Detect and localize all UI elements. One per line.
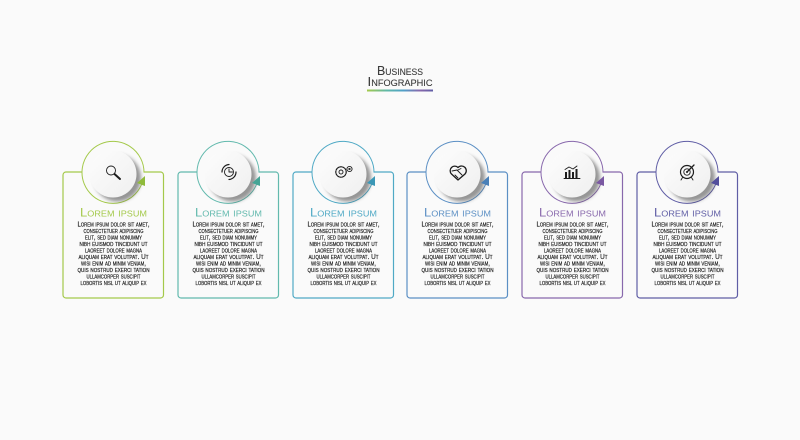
panel heading: Lorem ipsum [424, 208, 491, 220]
panel text: elit, sed diam nonummy [659, 234, 717, 242]
panel text: aliquam erat volutpat. Ut [194, 254, 264, 261]
panel heading: Lorem ipsum [80, 208, 147, 220]
icon: clock cycle [222, 164, 236, 180]
panel text: wisi enim ad minim veniam, [196, 260, 261, 268]
panel text: consectetuer adipiscing [198, 228, 259, 235]
panel text: Lorem ipsum dolor sit amet, [422, 222, 494, 228]
title: Infographic [368, 74, 433, 89]
panel text: lobortis nisl ut aliquip ex [196, 280, 262, 287]
panel text: laoreet dolore magna [544, 248, 602, 254]
panel text: quis nostrud exerci tation [308, 267, 380, 274]
panel heading: Lorem ipsum [310, 208, 377, 220]
panel heading: Lorem ipsum [539, 208, 606, 220]
panel text: elit, sed diam nonummy [85, 234, 143, 242]
panel text: quis nostrud exerci tation [422, 267, 494, 274]
panel text: quis nostrud exerci tation [536, 267, 609, 274]
panel text: lobortis nisl ut aliquip ex [424, 280, 491, 287]
panel text: nibh euismod tincidunt ut [654, 241, 722, 248]
icon: target with dart [680, 165, 694, 180]
title [367, 63, 433, 92]
panel text: nibh euismod tincidunt ut [310, 241, 378, 248]
panel text: consectetuer adipiscing [84, 228, 144, 235]
panel: step 4 blue [407, 141, 508, 298]
panel text: quis nostrud exerci tation [192, 267, 265, 274]
panel text: wisi enim ad minim veniam, [425, 260, 490, 268]
panel text: laoreet dolore magna [659, 248, 717, 254]
icon: magnifier [106, 166, 120, 179]
panel text: consectetuer adipiscing [542, 228, 603, 235]
panel text [536, 222, 609, 287]
icon: bar chart [564, 166, 580, 178]
panel text: quis nostrud exerci tation [652, 267, 724, 274]
panel text: nibh euismod tincidunt ut [424, 241, 492, 248]
panel text: lobortis nisl ut aliquip ex [654, 280, 721, 287]
icon: handshake heart [450, 166, 466, 180]
panel text [78, 222, 150, 287]
panel text: aliquam erat volutpat. Ut [78, 254, 148, 261]
panel text: ullamcorper suscipit [202, 274, 256, 280]
panel: step 2 teal [178, 141, 278, 298]
panel text: wisi enim ad minim veniam, [655, 260, 720, 268]
panel text: aliquam erat volutpat. Ut [308, 254, 378, 261]
panel text: lobortis nisl ut aliquip ex [80, 280, 147, 287]
panel text: ullamcorper suscipit [316, 274, 370, 280]
panel text: wisi enim ad minim veniam, [311, 260, 376, 268]
panel text [192, 222, 265, 287]
panel text: ullamcorper suscipit [86, 274, 140, 280]
panel text [308, 222, 380, 287]
panel text: elit, sed diam nonummy [429, 234, 487, 242]
panel text: wisi enim ad minim veniam, [81, 260, 146, 268]
panel text: ullamcorper suscipit [546, 274, 600, 280]
panel text: ullamcorper suscipit [430, 274, 484, 280]
panel: step 3 sky blue [293, 141, 394, 298]
panel heading: Lorem ipsum [654, 208, 721, 220]
panel text: aliquam erat volutpat. Ut [422, 254, 492, 261]
panel heading: Lorem ipsum [195, 208, 262, 220]
panel text: laoreet dolore magna [200, 248, 258, 254]
panel text [652, 222, 724, 287]
panel text: aliquam erat volutpat. Ut [538, 254, 608, 261]
panel text: aliquam erat volutpat. Ut [652, 254, 722, 261]
panel text: lobortis nisl ut aliquip ex [540, 280, 606, 287]
panel text: ullamcorper suscipit [660, 274, 714, 280]
panel text: elit, sed diam nonummy [544, 234, 602, 242]
panel text [422, 222, 494, 287]
panel text: nibh euismod tincidunt ut [80, 241, 148, 248]
panel text: Lorem ipsum dolor sit amet, [78, 222, 150, 228]
panel text: consectetuer adipiscing [314, 228, 374, 235]
icon: gears [336, 166, 352, 177]
panel text: laoreet dolore magna [429, 248, 487, 254]
panel: step 5 purple [522, 141, 622, 298]
panel text: Lorem ipsum dolor sit amet, [192, 222, 265, 228]
panel text: Lorem ipsum dolor sit amet, [308, 222, 380, 228]
panel text: nibh euismod tincidunt ut [538, 241, 606, 248]
panel text: elit, sed diam nonummy [200, 234, 258, 242]
panel text: consectetuer adipiscing [428, 228, 488, 235]
panel text: lobortis nisl ut aliquip ex [310, 280, 377, 287]
panel text: laoreet dolore magna [315, 248, 373, 254]
panel text: wisi enim ad minim veniam, [540, 260, 605, 268]
panel: step 1 green [63, 141, 164, 298]
panel text: elit, sed diam nonummy [315, 234, 373, 242]
panel text: laoreet dolore magna [85, 248, 143, 254]
panel text: quis nostrud exerci tation [78, 267, 150, 274]
panel text: Lorem ipsum dolor sit amet, [652, 222, 724, 228]
title: Business [377, 63, 423, 78]
panel: step 6 indigo [637, 141, 738, 298]
panel text: nibh euismod tincidunt ut [194, 241, 262, 248]
panel text: consectetuer adipiscing [658, 228, 718, 235]
panel text: Lorem ipsum dolor sit amet, [536, 222, 609, 228]
